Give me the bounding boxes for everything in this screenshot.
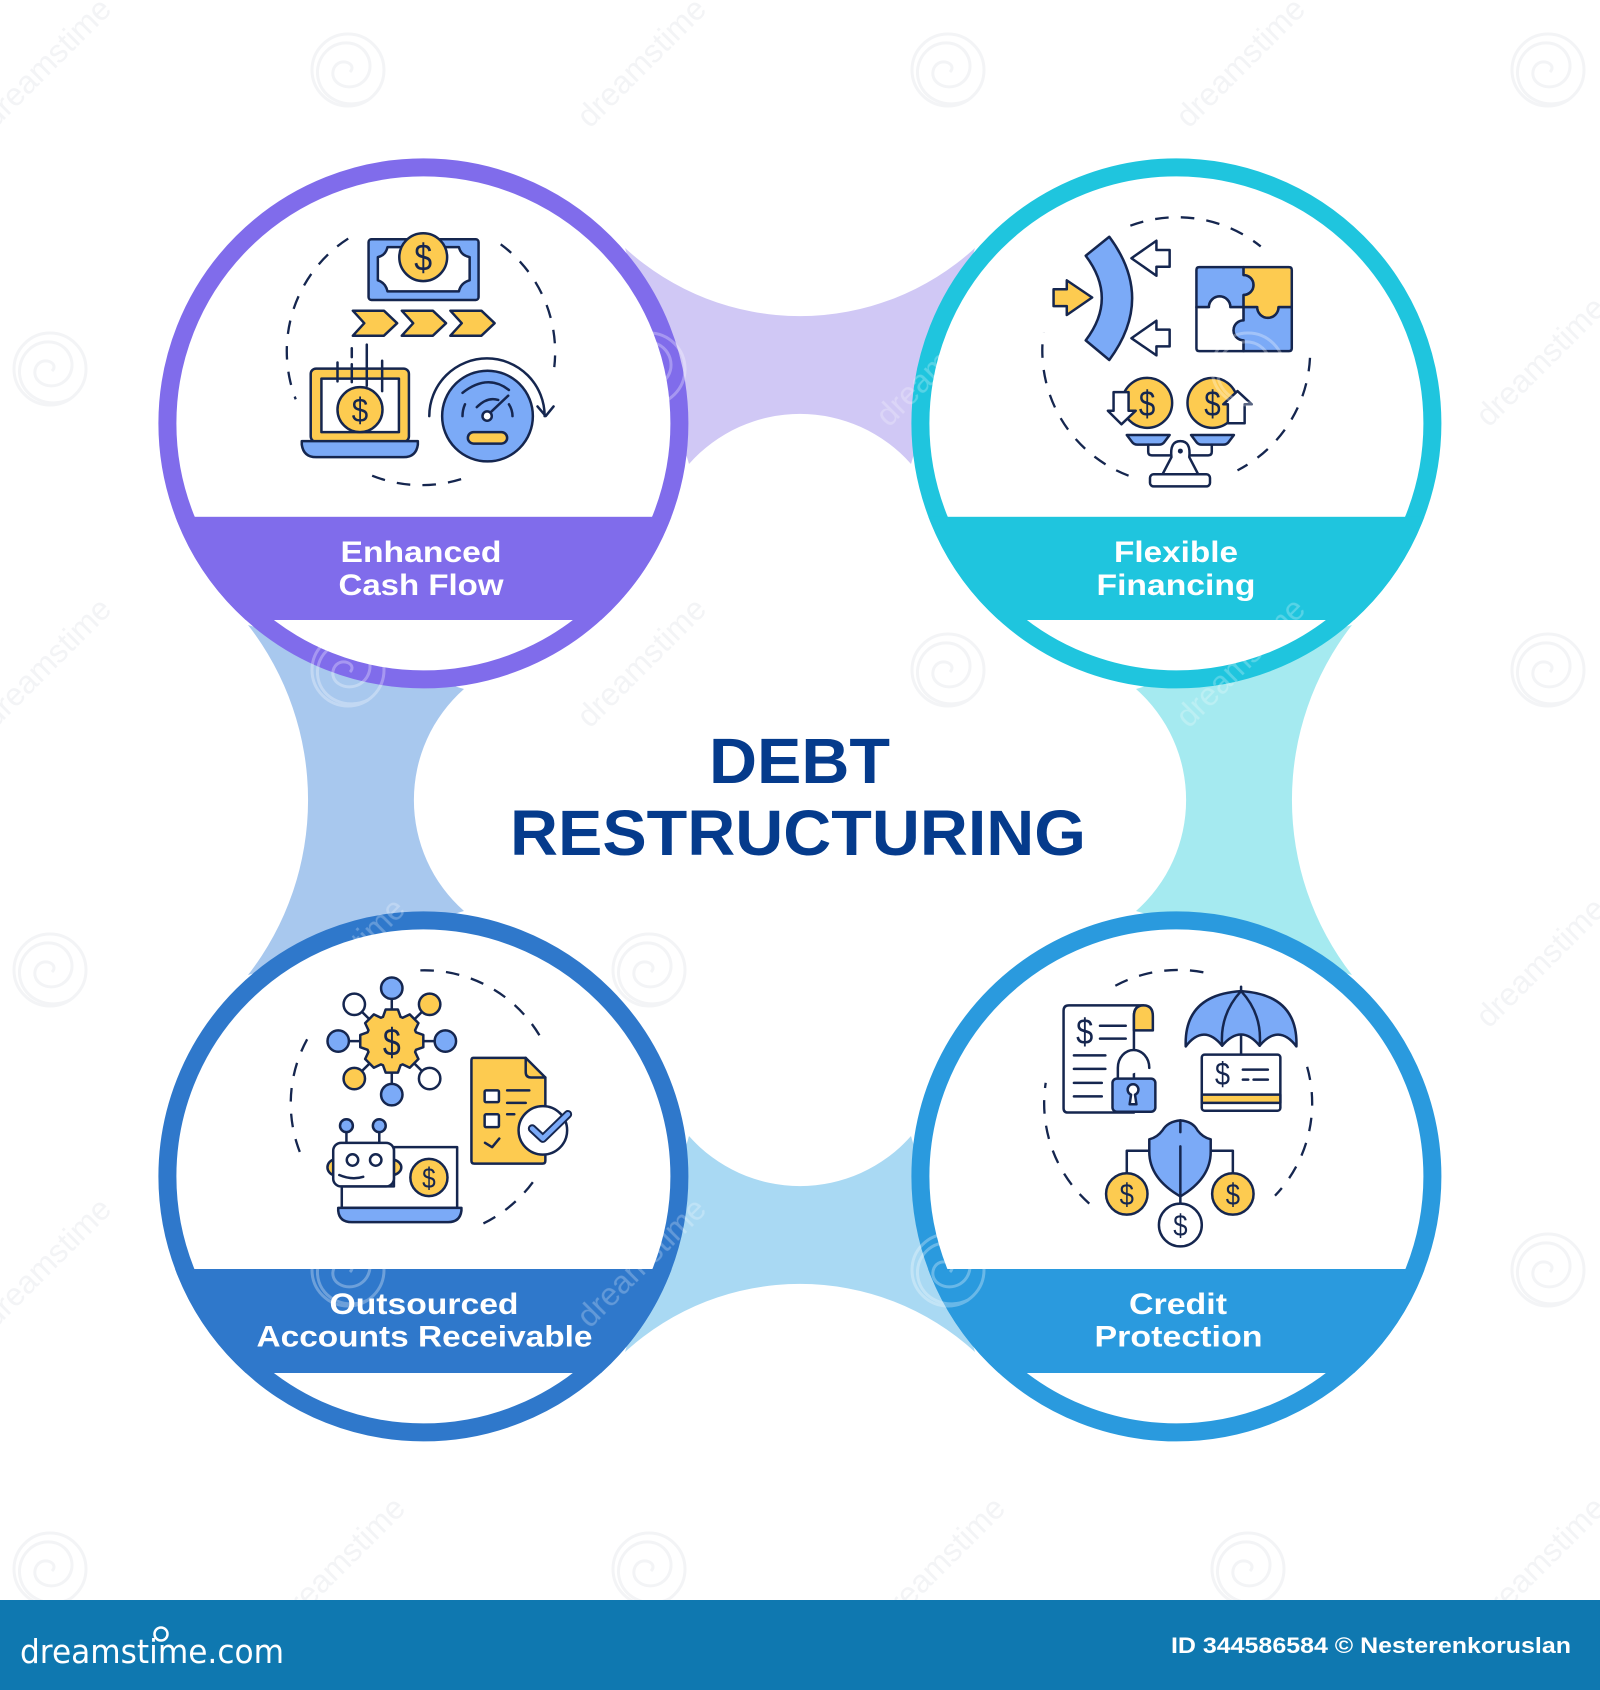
icon: flexible financing: $ [1139, 384, 1155, 424]
label text: Cash Flow [338, 569, 504, 602]
label text [1094, 1288, 1262, 1354]
ring [920, 920, 1432, 1432]
icon: outsourced receivables: $ [422, 1163, 436, 1195]
connector: right teal link [1136, 625, 1352, 975]
icon: credit protection: $ [1173, 1208, 1187, 1243]
icon: credit protection: $ [1076, 1012, 1093, 1052]
label band [928, 1269, 1425, 1373]
infographic canvas: dreamstime [569, 590, 713, 734]
footer credit: ID 344586584 © Nesterenkoruslan [1171, 1633, 1571, 1658]
label text: Flexible [1114, 536, 1238, 569]
icon: flexible financing [1042, 217, 1310, 486]
label text [1096, 536, 1256, 602]
label text: Financing [1096, 569, 1256, 602]
infographic canvas: dreamstime [1168, 590, 1312, 734]
connector: top purple link [625, 248, 975, 464]
icon: flexible financing: $ [1204, 384, 1221, 424]
icon: outsourced receivables [291, 970, 568, 1226]
connector: left blue link [248, 625, 464, 975]
label text: Accounts Receivable [256, 1320, 592, 1354]
title: RESTRUCTURING [510, 797, 1086, 869]
label band [175, 1269, 672, 1373]
label band [928, 516, 1424, 620]
label text [256, 1288, 592, 1354]
panel: Enhanced Cash Flow [150, 167, 710, 679]
title: DEBT [709, 725, 890, 797]
label text: Credit [1129, 1288, 1227, 1321]
ring [167, 920, 679, 1432]
icon: credit protection [1044, 970, 1312, 1246]
label text: Enhanced [340, 536, 502, 569]
label text: Outsourced [330, 1288, 518, 1321]
connector: bottom light blue link [625, 1136, 975, 1352]
infographic canvas: dreamstime [868, 289, 1012, 433]
infographic canvas: dreamstime [868, 1489, 1012, 1633]
infographic canvas: dreamstime [569, 1190, 713, 1334]
icon: cash flow: $ [352, 392, 368, 430]
infographic canvas: dreamstime [268, 890, 412, 1034]
icon: outsourced receivables: $ [383, 1020, 401, 1064]
label text: Protection [1094, 1320, 1262, 1354]
panel: Outsourced Accounts Receivable [150, 920, 710, 1432]
panel: Credit Protection [900, 920, 1460, 1432]
infographic canvas: dreamstime [268, 1489, 412, 1633]
icon: credit protection: $ [1215, 1056, 1230, 1092]
panel: Flexible Financing [900, 167, 1460, 679]
icon: cash flow [287, 233, 555, 485]
icon: cash flow: $ [414, 238, 432, 280]
ring [920, 167, 1432, 679]
footer logo: dreamstime.com [20, 1632, 284, 1671]
footer bar [0, 1600, 1600, 1690]
ring [167, 167, 679, 679]
icon: credit protection: $ [1226, 1177, 1240, 1212]
label band [175, 516, 672, 620]
label text [338, 536, 504, 602]
title [510, 725, 1086, 869]
icon: credit protection: $ [1120, 1177, 1134, 1212]
